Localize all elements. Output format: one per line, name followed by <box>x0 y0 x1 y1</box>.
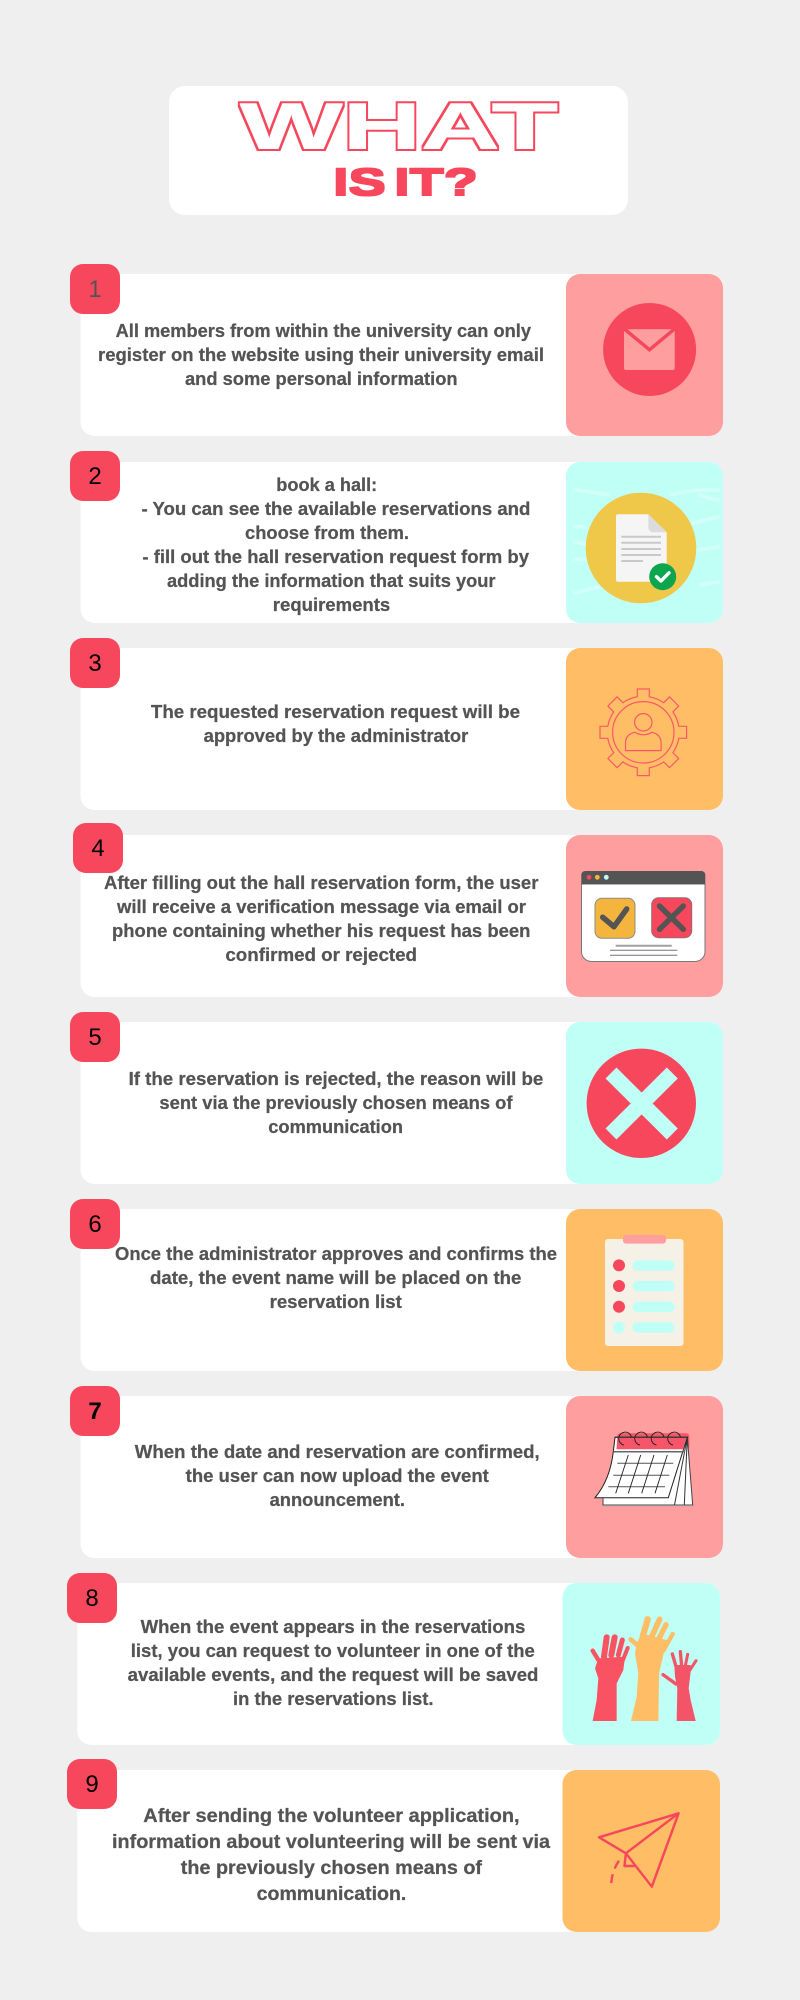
icon panel: rejected cross <box>566 1022 723 1184</box>
badge 5: 5 <box>88 1024 102 1051</box>
icon panel: approved document <box>566 462 723 623</box>
badge 2 <box>70 451 120 501</box>
badge 3: 3 <box>88 650 102 677</box>
step 8 text: When the event appears in the reservations <box>141 1617 525 1637</box>
icon panel: email <box>566 274 723 436</box>
panel: step 6 <box>70 1199 723 1371</box>
panel: step 2 <box>70 451 723 623</box>
badge 4: 4 <box>91 835 105 862</box>
step 3 text <box>151 702 520 746</box>
panel: step 9 <box>67 1759 720 1932</box>
badge 9 <box>67 1759 117 1809</box>
step 2 text: book a hall: <box>276 475 377 495</box>
step 4 text: phone containing whether his request has been <box>112 921 530 941</box>
step 5 text <box>129 1069 543 1137</box>
step 7 text <box>135 1442 540 1510</box>
icon panel: checklist clipboard <box>566 1209 723 1371</box>
panel: step 8 <box>67 1573 720 1745</box>
step 2 text: choose from them. <box>245 523 409 543</box>
step 6 text: date, the event name will be placed on the <box>150 1268 521 1288</box>
step 9 text: After sending the volunteer application, <box>143 1806 520 1827</box>
subtitle: IS IT?: IS IT? <box>333 162 478 204</box>
badge 1: 1 <box>88 276 102 303</box>
step 8 text: in the reservations list. <box>233 1689 434 1709</box>
step 1 text <box>98 321 544 389</box>
icon panel: user gear <box>566 648 723 810</box>
step 4 text: will receive a verification message via email or <box>116 897 526 917</box>
badge 5 <box>70 1012 120 1062</box>
icon panel: browser window with check and cross <box>566 835 723 997</box>
step 7 text: the user can now upload the event <box>186 1466 489 1486</box>
panel: step 7 <box>70 1386 723 1558</box>
badge 1 <box>70 264 120 314</box>
step 2 text: requirements <box>273 595 390 615</box>
panel: step 4 <box>73 823 723 997</box>
icon panel: raised hands <box>562 1583 720 1745</box>
step 9 text: information about volunteering will be sent via <box>112 1832 550 1853</box>
step 6 text: reservation list <box>270 1292 402 1312</box>
step 8 text: available events, and the request will be saved <box>128 1665 538 1685</box>
step 3 text: The requested reservation request will be <box>151 702 520 722</box>
step 7 text: announcement. <box>270 1490 405 1510</box>
badge 4 <box>73 823 123 873</box>
step 2 text <box>142 475 530 615</box>
step 3 text: approved by the administrator <box>204 726 468 746</box>
badge 7 <box>70 1386 120 1436</box>
badge 2: 2 <box>88 463 102 490</box>
step 4 text: After filling out the hall reservation form, the user <box>104 873 538 893</box>
step 9 text <box>112 1806 550 1905</box>
step 9 text: communication. <box>257 1884 406 1905</box>
step 5 text: If the reservation is rejected, the reason will be <box>129 1069 543 1089</box>
step 9 text: the previously chosen means of <box>181 1858 483 1879</box>
step 6 text: Once the administrator approves and confirms the <box>115 1244 557 1264</box>
step 1 text: and some personal information <box>185 369 458 389</box>
icon panel: calendar <box>566 1396 723 1558</box>
badge 8: 8 <box>85 1585 99 1612</box>
step 2 text: - fill out the hall reservation request form by <box>142 547 529 567</box>
badge 7: 7 <box>88 1398 102 1425</box>
badge 9: 9 <box>85 1771 99 1798</box>
panel: step 5 <box>70 1012 723 1184</box>
step 6 text <box>115 1244 557 1312</box>
step 2 text: adding the information that suits your <box>167 571 495 591</box>
step 7 text: When the date and reservation are confirmed, <box>135 1442 540 1462</box>
step 4 text: confirmed or rejected <box>225 945 417 965</box>
badge 6: 6 <box>88 1211 102 1238</box>
badge 8 <box>67 1573 117 1623</box>
step 8 text <box>128 1617 538 1709</box>
title panel <box>169 86 628 215</box>
step 2 text: - You can see the available reservations and <box>142 499 530 519</box>
title: WHAT: WHAT <box>240 89 558 162</box>
panel: step 1 <box>70 264 723 436</box>
panel: step 3 <box>70 638 723 810</box>
step 5 text: sent via the previously chosen means of <box>159 1093 514 1113</box>
step 8 text: list, you can request to volunteer in one of the <box>131 1641 535 1661</box>
badge 6 <box>70 1199 120 1249</box>
step 5 text: communication <box>268 1117 403 1137</box>
step 1 text: register on the website using their university email <box>98 345 544 365</box>
step 4 text <box>104 873 538 965</box>
step 1 text: All members from within the university can only <box>116 321 531 341</box>
icon panel: paper plane <box>562 1770 720 1932</box>
badge 3 <box>70 638 120 688</box>
